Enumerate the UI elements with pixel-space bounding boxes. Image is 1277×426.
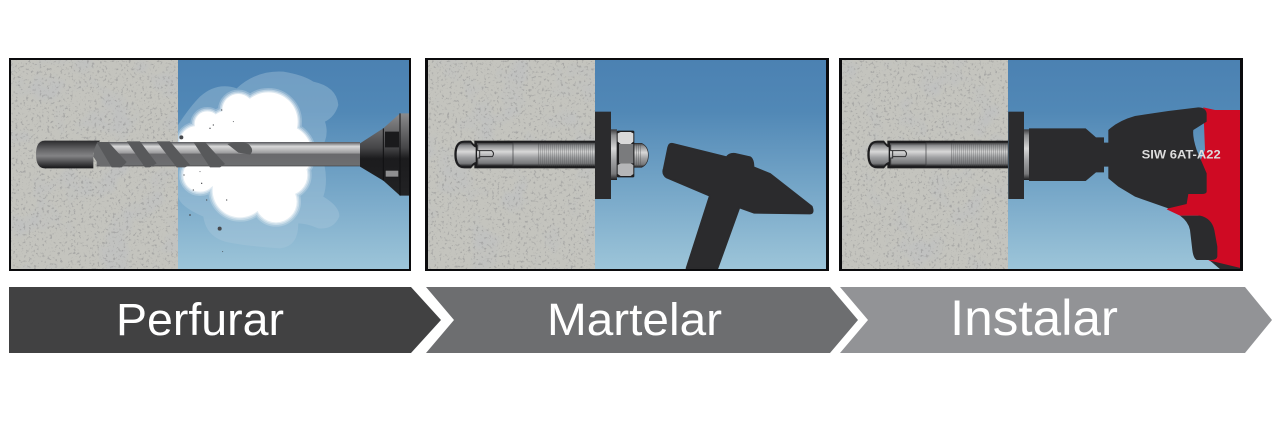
label: Perfurar: Perfurar xyxy=(116,294,284,345)
arrow: Martelar xyxy=(426,287,858,353)
arrow: Perfurar xyxy=(9,287,441,353)
panel: Perfurar illustration xyxy=(9,58,411,271)
panel: Instalar illustration xyxy=(839,58,1243,273)
hammer xyxy=(663,144,813,268)
arrow: Instalar xyxy=(840,287,1272,353)
washer xyxy=(1024,129,1029,180)
blue background xyxy=(595,59,828,270)
debris particles xyxy=(179,109,234,252)
concrete wall xyxy=(427,59,595,270)
tool base xyxy=(1210,260,1240,269)
concrete wall xyxy=(10,59,178,270)
bolt end xyxy=(633,143,648,167)
washer xyxy=(611,129,617,180)
socket and tool body xyxy=(1029,107,1207,208)
anchor bolt xyxy=(454,141,595,168)
label: Martelar: Martelar xyxy=(547,294,722,345)
label: Instalar: Instalar xyxy=(950,290,1118,346)
panel: Martelar illustration xyxy=(425,58,829,271)
model label: SIW 6AT-A22 xyxy=(1142,147,1221,161)
base plate xyxy=(595,112,611,199)
blue background xyxy=(178,59,410,270)
base plate xyxy=(1008,112,1024,199)
dust cloud xyxy=(178,72,339,248)
drill chuck xyxy=(360,113,409,196)
nut xyxy=(617,131,634,177)
drill bit xyxy=(36,141,360,168)
tool handle xyxy=(1180,216,1217,260)
red tool housing xyxy=(1167,107,1242,272)
anchor bolt xyxy=(867,141,1008,168)
blue background xyxy=(1008,59,1241,270)
infographic: three-step anchor installation xyxy=(9,58,1272,353)
concrete wall xyxy=(841,59,1008,270)
